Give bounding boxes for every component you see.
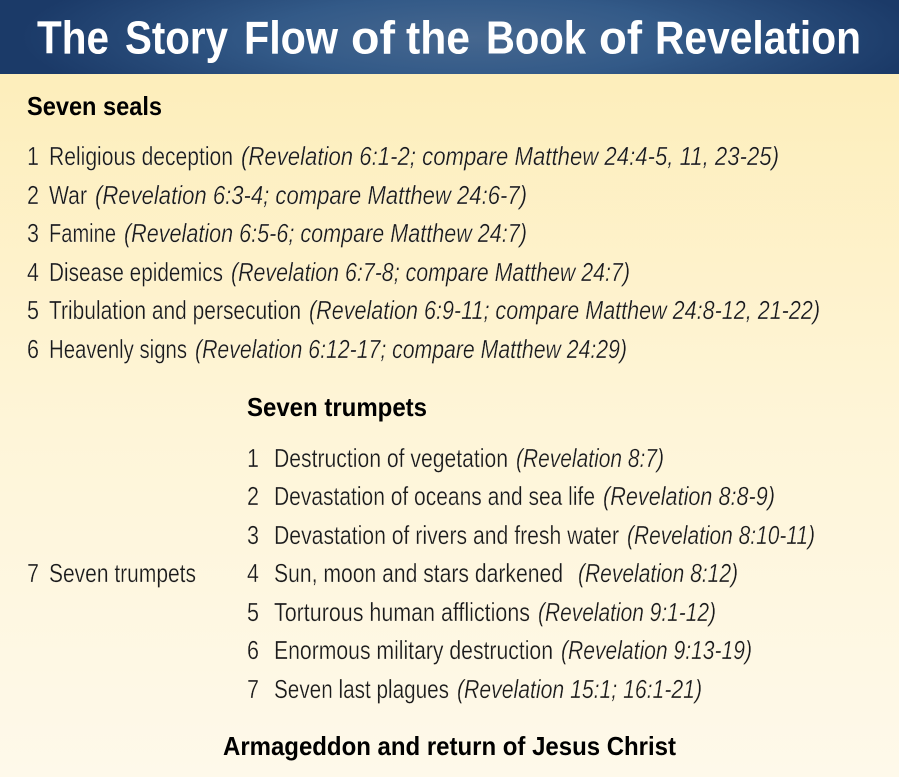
trumpet 7: 7: [247, 674, 259, 704]
seal 3: [27, 218, 527, 248]
seal 5: 5: [27, 295, 39, 325]
seal 4: Disease epidemics: [49, 257, 223, 287]
trumpet 7: Seven last plagues: [274, 674, 449, 704]
seal 2: 2: [27, 180, 39, 210]
trumpet 6: Enormous military destruction: [274, 635, 553, 665]
trumpet 1: 1: [247, 443, 259, 473]
seal 1: 1: [27, 141, 39, 171]
seal 6: (Revelation 6:12-17; compare Matthew 24:29): [195, 334, 627, 364]
trumpet 7: [247, 674, 702, 704]
seal 3: Famine: [49, 218, 116, 248]
heading: seven seals: Seven seals: [27, 91, 162, 121]
trumpet 6: [247, 635, 752, 665]
seal 2: War: [49, 180, 87, 210]
panel: seven trumpets: [247, 392, 815, 704]
seal 4: (Revelation 6:7-8; compare Matthew 24:7): [231, 257, 630, 287]
seal 7: 7: [27, 558, 39, 588]
title banner: [0, 0, 899, 74]
trumpet 5: 5: [247, 597, 259, 627]
panel: seven seals: [27, 91, 820, 588]
trumpet 5: (Revelation 9:1-12): [538, 597, 716, 627]
title banner: Flow: [244, 12, 338, 64]
seal 6: [27, 334, 627, 364]
seal 4: [27, 257, 630, 287]
title banner: Book: [486, 12, 586, 64]
trumpet 6: (Revelation 9:13-19): [561, 635, 752, 665]
title banner: Revelation: [655, 12, 861, 64]
closing heading: Armageddon and return of Jesus Christ: [223, 731, 676, 761]
seal 6: Heavenly signs: [49, 334, 187, 364]
seal 1: Religious deception: [49, 141, 233, 171]
seal 1: (Revelation 6:1-2; compare Matthew 24:4-5, 11, 23-25): [241, 141, 779, 171]
trumpet 3: Devastation of rivers and fresh water: [274, 520, 619, 550]
trumpet 2: Devastation of oceans and sea life: [274, 481, 595, 511]
trumpet 4: Sun, moon and stars darkened: [274, 558, 563, 588]
seal 5: [27, 295, 820, 325]
trumpet 5: Torturous human afflictions: [274, 597, 530, 627]
title banner: of: [351, 12, 396, 64]
heading: seven trumpets: Seven trumpets: [247, 392, 427, 422]
trumpet 5: [247, 597, 716, 627]
seal 2: (Revelation 6:3-4; compare Matthew 24:6-7): [95, 180, 527, 210]
seal 7: Seven trumpets: [49, 558, 196, 588]
seal 3: 3: [27, 218, 39, 248]
trumpet 1: [247, 443, 664, 473]
trumpet 3: 3: [247, 520, 259, 550]
seal 6: 6: [27, 334, 39, 364]
seal 1: [27, 141, 779, 171]
trumpet 6: 6: [247, 635, 259, 665]
trumpet 2: 2: [247, 481, 259, 511]
trumpet 4: 4: [247, 558, 259, 588]
seal 5: Tribulation and persecution: [49, 295, 301, 325]
trumpet 1: Destruction of vegetation: [274, 443, 508, 473]
trumpet 7: (Revelation 15:1; 16:1-21): [457, 674, 702, 704]
trumpet 3: (Revelation 8:10-11): [627, 520, 815, 550]
trumpet 1: (Revelation 8:7): [516, 443, 664, 473]
title banner: of: [599, 12, 643, 64]
seal 4: 4: [27, 257, 39, 287]
title banner: The: [37, 12, 109, 64]
trumpet 4: (Revelation 8:12): [578, 558, 738, 588]
title banner: the: [406, 12, 470, 64]
title banner: Story: [125, 12, 228, 64]
trumpet 2: (Revelation 8:8-9): [603, 481, 775, 511]
seal 3: (Revelation 6:5-6; compare Matthew 24:7): [124, 218, 527, 248]
